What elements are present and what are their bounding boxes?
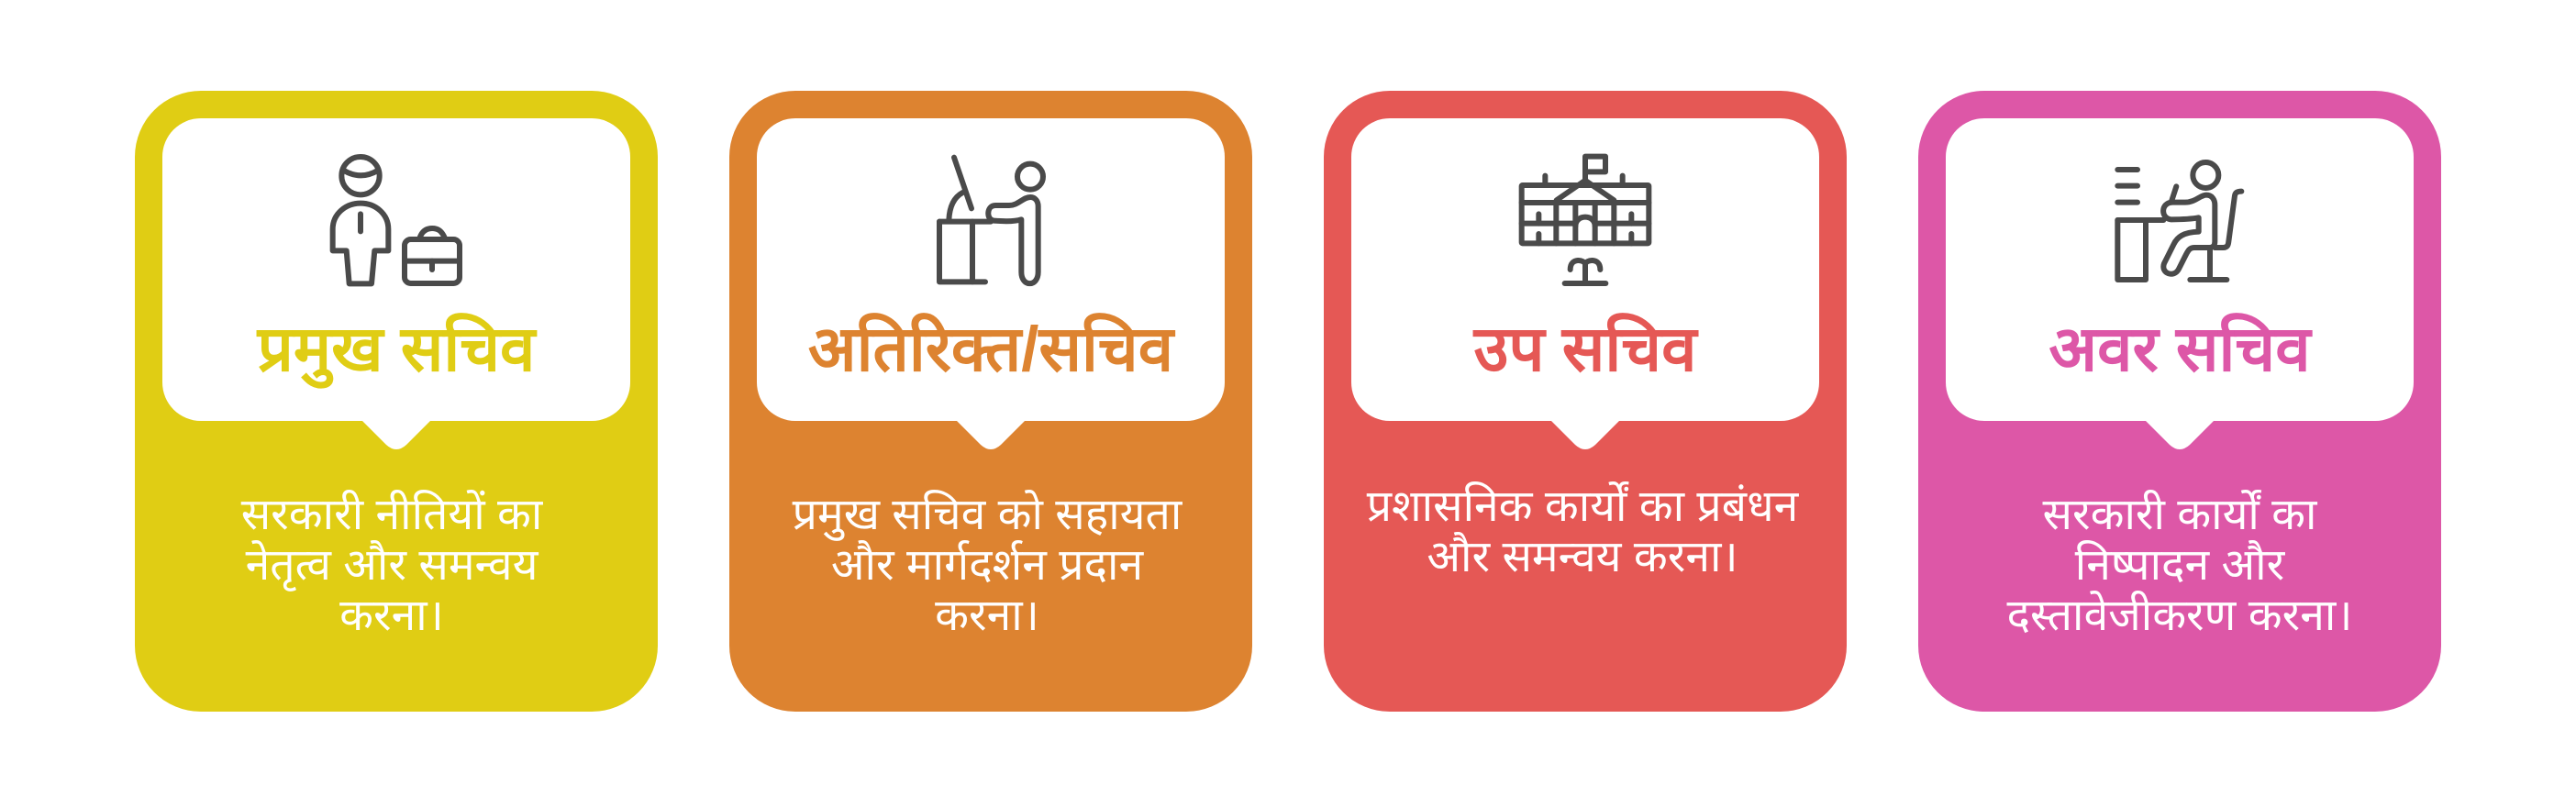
panel: उप सचिव bbox=[1324, 91, 1847, 712]
bubble pointer bbox=[1551, 421, 1619, 449]
description: नेतृत्व और समन्वय bbox=[246, 541, 538, 590]
description: और समन्वय करना। bbox=[1427, 533, 1738, 581]
panel: अवर सचिव bbox=[1918, 91, 2441, 712]
description: करना। bbox=[935, 591, 1039, 640]
icon: government building with flag bbox=[1519, 154, 1651, 286]
description: निष्पादन और bbox=[2075, 541, 2284, 590]
heading: प्रमुख सचिव bbox=[258, 314, 535, 384]
icon: person with briefcase bbox=[330, 154, 462, 286]
bubble pointer bbox=[2146, 421, 2214, 449]
description: प्रमुख सचिव को सहायता bbox=[793, 491, 1182, 539]
description: सरकारी नीतियों का bbox=[241, 491, 542, 539]
icon: seated person at desk bbox=[2115, 160, 2244, 282]
heading: अतिरिक्त/सचिव bbox=[808, 314, 1173, 384]
description bbox=[793, 490, 1183, 640]
description: करना। bbox=[339, 591, 444, 640]
speech bubble bbox=[1946, 118, 2414, 421]
description bbox=[1367, 481, 1799, 581]
speech bubble bbox=[757, 118, 1225, 421]
description bbox=[2007, 490, 2352, 640]
bubble pointer bbox=[362, 421, 430, 449]
icon: person at desk with monitor bbox=[937, 154, 1046, 286]
description: प्रशासनिक कार्यों का प्रबंधन bbox=[1367, 482, 1798, 531]
description bbox=[240, 490, 543, 640]
panel: अतिरिक्त/सचिव bbox=[729, 91, 1252, 712]
panel: प्रमुख सचिव bbox=[135, 91, 658, 712]
speech bubble bbox=[162, 118, 630, 421]
description: और मार्गदर्शन प्रदान bbox=[831, 541, 1143, 590]
description: सरकारी कार्यों का bbox=[2042, 491, 2316, 539]
speech bubble bbox=[1351, 118, 1819, 421]
heading: उप सचिव bbox=[1474, 314, 1696, 384]
heading: अवर सचिव bbox=[2049, 314, 2311, 384]
description: दस्तावेजीकरण करना। bbox=[2007, 591, 2352, 640]
bubble pointer bbox=[957, 421, 1025, 449]
